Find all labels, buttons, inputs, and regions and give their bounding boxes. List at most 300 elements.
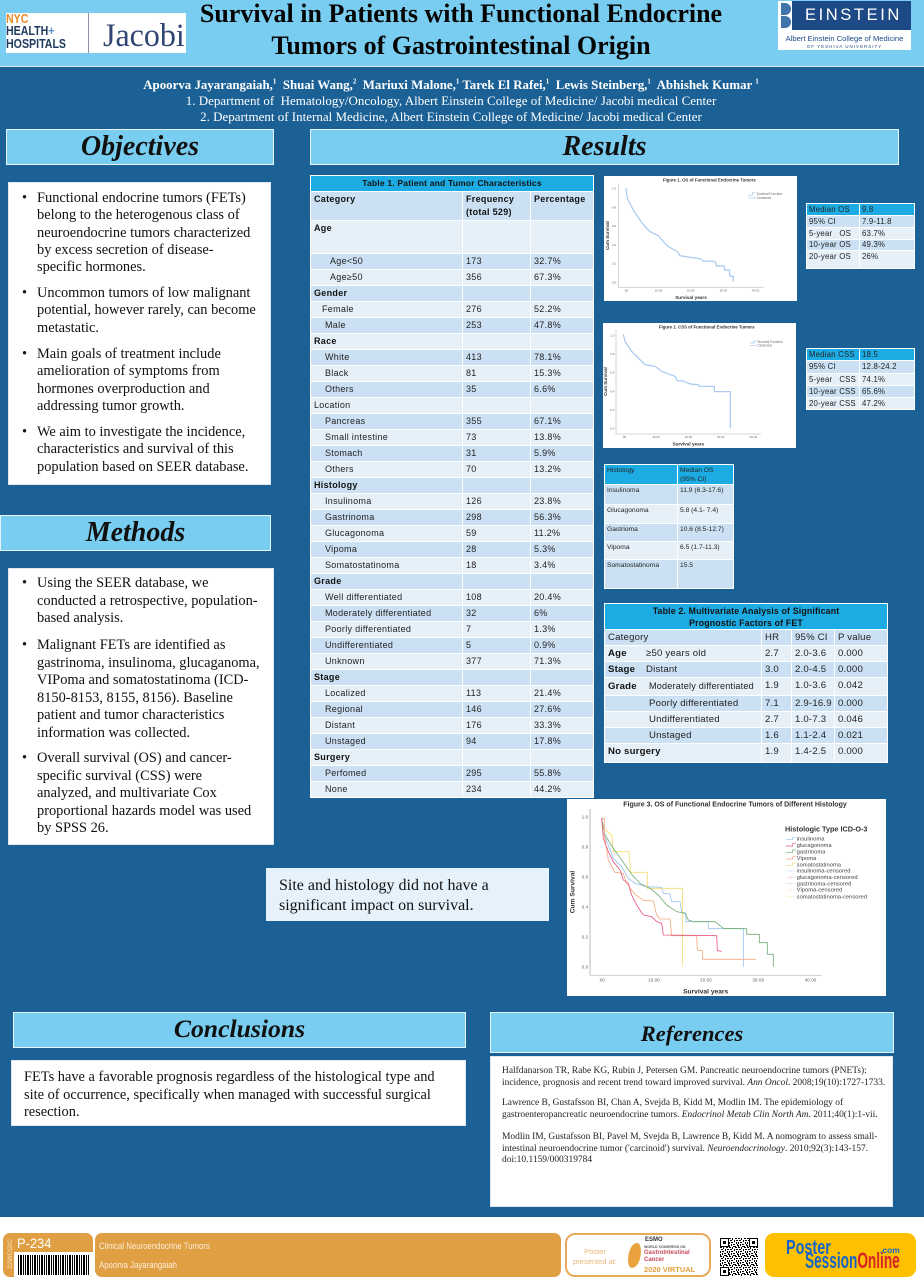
table 1: patient and tumor characteristics: 32.7% (534, 256, 561, 266)
table 1: patient and tumor characteristics: None (325, 784, 348, 794)
table 1: patient and tumor characteristics: Poorly differentiated (325, 624, 411, 634)
table 1: patient and tumor characteristics: Age<50 (330, 256, 363, 266)
figure 3: OS by histology Kaplan-Meier chart: 0.8 (582, 845, 589, 850)
figure 1: OS Kaplan-Meier curve: 0.2 (612, 262, 616, 266)
table 2: multivariate analysis: 0.000 (838, 664, 863, 675)
authors and affiliations: 1. Department of Hematology/Oncology, Albert Einstein College of Medicine/ Jacobi medical Center (186, 93, 716, 108)
table 1: patient and tumor characteristics: Well differentiated (325, 592, 402, 602)
table 1: patient and tumor characteristics: 11.2% (534, 528, 560, 538)
table: median OS by histology: Glucagonoma (607, 507, 649, 514)
curve: somatostatinoma (602, 818, 682, 967)
figure 2: CSS Kaplan-Meier curve: 1.0 (610, 333, 615, 337)
table: OS summary: 9.8 (862, 205, 873, 214)
table: median OS by histology: Somatostatinoma (607, 562, 659, 569)
authors and affiliations (143, 78, 759, 124)
legend: insulinoma-censored (797, 869, 850, 875)
table 1: patient and tumor characteristics: 146 (466, 704, 482, 714)
bullet: study aim (9, 424, 270, 476)
figure 3: OS by histology Kaplan-Meier chart: 40.00 (805, 978, 817, 983)
table 2: multivariate analysis: Moderately differentiated (649, 681, 754, 691)
figure 1: OS Kaplan-Meier curve: 1.0 (612, 186, 616, 190)
heading: Results: Results (562, 131, 647, 162)
reference 3: intestinal neuroendocrine tumor ('carcinoid') survival. Neuroendocrinology. 2010;92(3):143-157. (502, 1144, 868, 1154)
table 1: patient and tumor characteristics: 20.4% (534, 592, 561, 602)
table 1: patient and tumor characteristics: Pancreas (325, 416, 365, 426)
heading: Objectives: Objectives (81, 131, 199, 162)
table 2: multivariate analysis: 0.000 (838, 746, 863, 757)
table 1: patient and tumor characteristics: 32 (466, 608, 477, 618)
table: OS summary: Median OS (809, 205, 850, 214)
table 2: multivariate analysis: Distant (646, 664, 677, 675)
figure 3: OS by histology Kaplan-Meier chart: .00 (598, 978, 605, 983)
table 2: multivariate analysis: 0.042 (838, 680, 863, 691)
table 1: patient and tumor characteristics: 94 (466, 736, 477, 746)
figure 1: OS Kaplan-Meier curve: 0.0 (612, 280, 616, 284)
panel: conclusions text: resection. (24, 1104, 80, 1120)
table: median OS by histology: 15.5 (680, 562, 693, 569)
bullet: what FETs are: by excess secretion of disease- (37, 242, 214, 258)
logo: Albert Einstein College of Medicine: OF YESHIVA UNIVERSITY (807, 44, 882, 49)
table 1: patient and tumor characteristics: 18 (466, 560, 477, 570)
table 1: patient and tumor characteristics: 298 (466, 512, 482, 522)
table 1: patient and tumor characteristics: Somatostatinoma (325, 560, 400, 570)
table 1: patient and tumor characteristics: 13.8% (534, 432, 561, 442)
table 1: patient and tumor characteristics: 413 (466, 352, 482, 362)
table 2: multivariate analysis: 2.7 (765, 648, 779, 659)
figure 1: OS Kaplan-Meier curve: 0.8 (612, 205, 616, 209)
figure 2: CSS Kaplan-Meier curve (603, 323, 796, 448)
bullet: goals of treatment (9, 346, 270, 415)
figure 2: CSS Kaplan-Meier curve: 10.00 (652, 435, 660, 439)
figure 1: OS Kaplan-Meier curve: 0.4 (612, 243, 616, 247)
table 2: multivariate analysis: Prognostic Factors of FET (689, 618, 803, 628)
bullet: survival analysis: analyzed, and multivariate Cox (37, 785, 217, 801)
figure 2: CSS Kaplan-Meier curve: .00 (622, 435, 626, 439)
footer: QR code (720, 1238, 758, 1276)
table 2: multivariate analysis: Grade (608, 681, 637, 692)
table 1: patient and tumor characteristics: 5.3% (534, 544, 556, 554)
table 1: patient and tumor characteristics: Others (325, 464, 354, 474)
table 2: multivariate analysis: 3.0 (765, 664, 779, 675)
logo: NYC Health + Hospitals and Jacobi: HOSPITALS (6, 37, 66, 51)
table 1: patient and tumor characteristics: 52.2% (534, 304, 561, 314)
table: OS summary (806, 203, 915, 269)
legend: gastrinoma-censored (797, 881, 851, 887)
reference 3: Modlin IM, Gustafsson BI, Pavel M, Svejda B, Lawrence B, Kidd M. A nomogram to assess small- (502, 1132, 877, 1142)
logo: NYC Health + Hospitals and Jacobi (6, 13, 186, 53)
reference 3: doi:10.1159/000319784 (502, 1155, 592, 1165)
table 1: patient and tumor characteristics: 3.4% (534, 560, 556, 570)
footer: PosterSessionOnline logo: SessionOnline (805, 1248, 900, 1273)
authors and affiliations: Apoorva Jayarangaiah,1 Shuai Wang,2 Mariuxi Malone,1 Tarek El Rafei,1 Lewis Steinberg,1 Abhishek Kumar 1 (143, 78, 759, 92)
table 2: multivariate analysis: 0.000 (838, 648, 863, 659)
figure 3: OS by histology Kaplan-Meier chart: Cum Survival (570, 871, 577, 913)
bullet: tumor identification: information was collected. (37, 725, 190, 741)
footer: presented at badge: Poster (584, 1247, 606, 1256)
bullet: goals of treatment: amelioration of symptoms from (37, 363, 220, 379)
table 1: patient and tumor characteristics: Female (322, 304, 354, 314)
table 1: patient and tumor characteristics: 6% (534, 608, 548, 618)
table 1: patient and tumor characteristics: 276 (466, 304, 482, 314)
bullet: goals of treatment: hormones overproduction and (37, 381, 210, 397)
legend: glucagonoma-censored (797, 875, 858, 881)
legend: glucagonoma (797, 843, 832, 849)
table 1: patient and tumor characteristics: Histology (314, 480, 358, 490)
logo: Albert Einstein College of Medicine: Albert Einstein College of Medicine (786, 34, 903, 43)
figure 2: CSS Kaplan-Meier curve: 0.2 (610, 408, 615, 412)
table 2: multivariate analysis: 2.0-3.6 (795, 648, 826, 659)
figure 3: OS by histology Kaplan-Meier chart (567, 799, 886, 996)
authors and affiliations: 2. Department of Internal Medicine, Albert Einstein College of Medicine/ Jacobi medical Center (200, 109, 702, 124)
figure 1: OS Kaplan-Meier curve: Survival Function (757, 192, 782, 196)
table: OS summary: 7.9-11.8 (862, 217, 892, 226)
table 1: patient and tumor characteristics: 113 (466, 688, 481, 698)
heading: Conclusions (13, 1012, 466, 1048)
reference 2: gastroenteropancreatic neuroendocrine tumors. Endocrinol Metab Clin North Am. 2011;40(1):1-vii. (502, 1110, 878, 1120)
logo: NYC Health + Hospitals and Jacobi: HEALTH+ (6, 24, 55, 38)
reference 1 (502, 1066, 885, 1088)
bullet: malignant potential: metastatic. (37, 320, 99, 336)
conference code: 22WCGIC (7, 1239, 14, 1269)
table 2: multivariate analysis: 0.046 (838, 714, 863, 725)
table 1: patient and tumor characteristics: 355 (466, 416, 482, 426)
table 2: multivariate analysis: Age (608, 648, 627, 659)
table 1: patient and tumor characteristics: 5 (466, 640, 471, 650)
table 2: multivariate analysis: 1.1-2.4 (795, 730, 826, 741)
reference 2 (502, 1098, 878, 1120)
table 2: multivariate analysis: 7.1 (765, 698, 779, 709)
table 1: patient and tumor characteristics: Surgery (314, 752, 350, 762)
bullet: survival analysis: Overall survival (OS) and cancer- (37, 750, 232, 766)
table 2: multivariate analysis: Category (608, 632, 649, 643)
legend: Vipoma-censored (797, 888, 842, 894)
table: OS summary: 63.7% (862, 229, 885, 238)
figure 1: OS Kaplan-Meier curve (604, 176, 797, 301)
table 1: patient and tumor characteristics: 28 (466, 544, 477, 554)
footer: poster ID tab (3, 1233, 93, 1277)
table 1: patient and tumor characteristics: 1.3% (534, 624, 556, 634)
table 2: multivariate analysis: 0.021 (838, 730, 863, 741)
heading: Methods (0, 515, 271, 551)
table 1: patient and tumor characteristics: Distant (325, 720, 355, 730)
footer: topic and author bar (95, 1233, 561, 1277)
heading: Results (310, 129, 899, 165)
panel: conclusions text (11, 1060, 466, 1126)
bullet: what FETs are: specific hormones. (37, 259, 146, 275)
table 1: patient and tumor characteristics: 17.8% (534, 736, 561, 746)
table 1: patient and tumor characteristics: Category (314, 194, 355, 204)
figure 3: OS by histology Kaplan-Meier chart: 0.0 (582, 964, 589, 969)
table: OS summary: 20-year OS (809, 252, 851, 261)
bullet: tumor identification: Malignant FETs are identified as (37, 637, 225, 653)
bullet: tumor identification: patient and tumor characteristics (37, 707, 224, 723)
table 1: patient and tumor characteristics: Vipoma (325, 544, 357, 554)
table 2: multivariate analysis: ≥50 years old (646, 648, 706, 659)
table: CSS summary: Median CSS (809, 350, 855, 359)
figure 3: OS by histology Kaplan-Meier chart: Figure 3. OS of Functional Endocrine Tumors of Different Histology (623, 801, 847, 808)
footer: presented at badge: ESMO (645, 1237, 663, 1243)
table 1: patient and tumor characteristics: (total 529) (466, 206, 512, 216)
table 1: patient and tumor characteristics: Undifferentiated (325, 640, 393, 650)
table 1: patient and tumor characteristics: Gender (314, 288, 347, 298)
table 1: patient and tumor characteristics: 173 (466, 256, 482, 266)
bullet: what FETs are (9, 190, 270, 276)
footer: presented at badge (565, 1233, 711, 1277)
table 2: multivariate analysis: Stage (608, 664, 635, 675)
legend: somatostatinoma (797, 862, 842, 868)
table 2: multivariate analysis: 1.9 (765, 746, 779, 757)
footer: presented at badge: Cancer (644, 1257, 664, 1263)
table 1: patient and tumor characteristics: Small intestine (325, 432, 388, 442)
panel: conclusions text: FETs have a favorable prognosis regardless of the histological type and (24, 1069, 435, 1085)
figure 2: CSS Kaplan-Meier curve: 20.00 (685, 435, 692, 439)
table 2: multivariate analysis: 95% CI (795, 632, 828, 643)
table 1: patient and tumor characteristics: Others (325, 384, 354, 394)
figure 1: OS Kaplan-Meier curve: .00 (624, 288, 628, 292)
table 2: multivariate analysis: 2.9-16.9 (795, 698, 832, 709)
figure 3: OS by histology Kaplan-Meier chart: 1.0 (582, 815, 589, 820)
legend: insulinoma (797, 837, 825, 843)
bullet: tumor identification: VIPoma and somatostatinoma (ICD- (37, 672, 248, 688)
table 1: patient and tumor characteristics: Regional (325, 704, 363, 714)
panel: conclusions text: site of occurrence, specifically when managed with successful surgical (24, 1086, 431, 1102)
table 1: patient and tumor characteristics: 5.9% (534, 448, 556, 458)
table: CSS summary (806, 348, 915, 410)
table 1: patient and tumor characteristics: 71.3% (534, 656, 561, 666)
table 1: patient and tumor characteristics: Unstaged (325, 736, 366, 746)
bullet: study design (9, 575, 273, 628)
reference 1: Halfdanarson TR, Rabe KG, Rubin J, Petersen GM. Pancreatic neuroendocrine tumors (PNETs): (502, 1066, 867, 1076)
heading: Methods: Methods (86, 517, 185, 548)
table 1: patient and tumor characteristics: Unknown (325, 656, 365, 666)
legend (785, 824, 867, 900)
panel: methods text (8, 568, 274, 845)
table 2: multivariate analysis: 0.000 (838, 698, 863, 709)
table: median OS by histology (604, 464, 734, 589)
table 1: patient and tumor characteristics: 70 (466, 464, 477, 474)
heading: References (490, 1012, 894, 1053)
table 2: multivariate analysis: 1.0-3.6 (795, 680, 826, 691)
table 1: patient and tumor characteristics: 56.3% (534, 512, 561, 522)
bullet: malignant potential: potential, however rarely, can become (37, 302, 256, 318)
bullet: malignant potential (9, 285, 270, 337)
figure 2: CSS Kaplan-Meier curve: Survival years (673, 441, 705, 446)
legend: gastrinoma (797, 850, 826, 856)
figure 1: OS Kaplan-Meier curve: 0.6 (612, 224, 616, 228)
table 1: patient and tumor characteristics: Male (325, 320, 346, 330)
icon: wheat (628, 1243, 641, 1268)
table 1: patient and tumor characteristics: 33.3% (534, 720, 561, 730)
figure 2: CSS Kaplan-Meier curve: 0.0 (610, 427, 615, 431)
reference 2: Lawrence B, Gustafsson BI, Chan A, Svejda B, Kidd M, Modlin IM. The epidemiology of (502, 1098, 843, 1108)
table 1: patient and tumor characteristics: Perfomed (325, 768, 366, 778)
bullet: study aim: We aim to investigate the incidence, (37, 424, 245, 440)
table 1: patient and tumor characteristics: 15.3% (534, 368, 561, 378)
figure 2: CSS Kaplan-Meier curve: 0.6 (610, 371, 615, 375)
figure 3: OS by histology Kaplan-Meier chart: Survival years (683, 989, 729, 996)
table: median OS by histology: (95% CI) (680, 476, 706, 483)
table 1: patient and tumor characteristics: Frequency (466, 194, 514, 204)
logo: NYC Health + Hospitals and Jacobi: Jacobi (103, 18, 185, 53)
footer: presented at badge: WORLD CONGRESS ON (644, 1245, 686, 1249)
table 1: patient and tumor characteristics: 44.2% (534, 784, 561, 794)
table 1: patient and tumor characteristics: Glucagonoma (325, 528, 384, 538)
table 1: patient and tumor characteristics: 6.6% (534, 384, 556, 394)
reference 1: incidence, prognosis and recent trend toward improved survival. Ann Oncol. 2008;19(10):1727-1733. (502, 1078, 885, 1088)
figure 2: CSS Kaplan-Meier curve: Censored (757, 344, 772, 348)
table 1: patient and tumor characteristics: 356 (466, 272, 482, 282)
heading: Conclusions: Conclusions (174, 1014, 305, 1043)
table: CSS summary: 10-year CSS (809, 387, 856, 396)
table 1: patient and tumor characteristics: 59 (466, 528, 477, 538)
table 1: patient and tumor characteristics: White (325, 352, 350, 362)
figure 2: CSS Kaplan-Meier curve: Survival Function (757, 340, 783, 344)
footer: presented at badge: presented at: (573, 1257, 617, 1266)
heading: References: References (641, 1021, 743, 1046)
table 1: patient and tumor characteristics: Age≥50 (330, 272, 363, 282)
bullet: survival analysis: specific survival (CSS) were (37, 768, 202, 784)
table: median OS by histology: Vipoma (607, 544, 630, 551)
figure 3: OS by histology Kaplan-Meier chart: 30.00 (752, 978, 765, 983)
figure 1: OS Kaplan-Meier curve: 30.00 (720, 288, 727, 292)
table: median OS by histology: 6.5 (1.7-11.3) (680, 544, 720, 551)
curve: gastrinoma (602, 818, 773, 967)
table: OS summary: 49.3% (862, 240, 885, 249)
bullet: study design: conducted a retrospective, population- (37, 593, 258, 609)
table 2: multivariate analysis: 2.7 (765, 714, 779, 725)
table 1: patient and tumor characteristics: 126 (466, 496, 482, 506)
figure 3: OS by histology Kaplan-Meier chart: 0.6 (582, 875, 589, 880)
table 1: patient and tumor characteristics: Percentage (534, 194, 586, 204)
table 2: multivariate analysis: P value (838, 632, 871, 643)
heading: Objectives (6, 129, 274, 165)
table: OS summary: 5-year OS (809, 229, 851, 238)
figure 3: OS by histology Kaplan-Meier chart: 0.2 (582, 935, 589, 940)
table: OS summary: 95% CI (809, 217, 836, 226)
table: OS summary: 10-year OS (809, 240, 851, 249)
table 2: multivariate analysis: No surgery (608, 746, 661, 757)
table 1: patient and tumor characteristics: 253 (466, 320, 482, 330)
figure 2: CSS Kaplan-Meier curve: 30.00 (717, 435, 725, 439)
figure 2: CSS Kaplan-Meier curve: Figure 2. CSS of Functional Endocrine Tumors (659, 324, 755, 329)
table 1: patient and tumor characteristics: 73 (466, 432, 477, 442)
table 1: patient and tumor characteristics: 67.3% (534, 272, 561, 282)
bullet: survival analysis (9, 750, 273, 838)
table 1: patient and tumor characteristics: 27.6% (534, 704, 561, 714)
table 1: patient and tumor characteristics: 81 (466, 368, 477, 378)
bullet: tumor identification: 8150-8153, 8155, 8156). Baseline (37, 690, 233, 706)
figure 2: CSS Kaplan-Meier curve: 0.8 (610, 352, 615, 356)
table: CSS summary: 20-year CSS (809, 399, 856, 408)
table 2: multivariate analysis (604, 603, 888, 763)
footer: presented at badge: GastroIntestinal (644, 1250, 690, 1256)
panel: references (490, 1056, 893, 1207)
table: CSS summary: 95% CI (809, 362, 836, 371)
table 1: patient and tumor characteristics: 7 (466, 624, 471, 634)
header banner (0, 0, 924, 67)
table 1: patient and tumor characteristics: 234 (466, 784, 482, 794)
figure 1: OS Kaplan-Meier curve: 10.00 (655, 288, 662, 292)
footer: PosterSessionOnline logo (765, 1233, 916, 1277)
curve: glucagonoma (602, 818, 722, 951)
bullet: tumor identification: gastrinoma, insulinoma, glucaganoma, (37, 655, 260, 671)
table 1: patient and tumor characteristics: 0.9% (534, 640, 556, 650)
table 1: patient and tumor characteristics: 108 (466, 592, 482, 602)
title (200, 0, 722, 60)
footer: topic and author bar: Apoorva Jayarangaiah (99, 1260, 177, 1271)
table 1: patient and tumor characteristics: 78.1% (534, 352, 561, 362)
table 1: patient and tumor characteristics (310, 175, 594, 798)
bullet: goals of treatment: Main goals of treatment include (37, 346, 221, 362)
legend: Vipoma (797, 856, 817, 862)
bullet: what FETs are: belong to the heterogenous class of (37, 207, 240, 223)
table 1: patient and tumor characteristics: Localized (325, 688, 366, 698)
bullet: study aim: characteristics and survival of this (37, 441, 234, 457)
table 1: patient and tumor characteristics: Location (314, 400, 350, 410)
table 1: patient and tumor characteristics: Age (314, 222, 332, 232)
logo: Albert Einstein College of Medicine (778, 1, 911, 50)
figure 1: OS Kaplan-Meier curve: Survival years (675, 295, 707, 300)
bullet: what FETs are: neuroendocrine tumors characterized (37, 225, 250, 241)
table 1: patient and tumor characteristics: 176 (466, 720, 482, 730)
legend: somatostatinoma-censored (797, 894, 867, 900)
curve: insulinoma (602, 818, 743, 967)
logo: Albert Einstein College of Medicine: EINSTEIN (805, 6, 902, 24)
callout: site and histology (266, 868, 549, 921)
table 1: patient and tumor characteristics: 47.8% (534, 320, 561, 330)
table: CSS summary: 47.2% (862, 399, 885, 408)
panel: objectives text (8, 182, 271, 485)
figure 1: OS Kaplan-Meier curve: 40.00 (752, 288, 760, 292)
table 1: patient and tumor characteristics: Moderately differentiated (325, 608, 431, 618)
footer: PosterSessionOnline logo: Poster (786, 1237, 831, 1259)
figure 1: OS Kaplan-Meier curve: 20.00 (687, 288, 695, 292)
figure 2: CSS Kaplan-Meier curve: Cum Survival (603, 367, 608, 396)
footer: PosterSessionOnline logo: .com (880, 1245, 900, 1255)
table: median OS by histology: 10.6 (8.5-12.7) (680, 526, 724, 533)
footer: presented at badge: 2020 VIRTUAL (644, 1265, 695, 1274)
table 1: patient and tumor characteristics: 67.1% (534, 416, 561, 426)
figure 1: OS Kaplan-Meier curve: Figure 1. OS of Functional Endocrine Tumors (663, 178, 756, 183)
table 1: patient and tumor characteristics: Stage (314, 672, 340, 682)
figure 2: CSS Kaplan-Meier curve: 0.4 (610, 389, 615, 393)
table 1: patient and tumor characteristics: 55.8% (534, 768, 561, 778)
table: CSS summary: 74.1% (862, 375, 885, 384)
table 1: patient and tumor characteristics: Stomach (325, 448, 363, 458)
table 1: patient and tumor characteristics: 35 (466, 384, 477, 394)
table 1: patient and tumor characteristics: Gastrinoma (325, 512, 375, 522)
table 1: patient and tumor characteristics: Grade (314, 576, 342, 586)
table: CSS summary: 5-year CSS (809, 375, 856, 384)
bullet: study design: based analysis. (37, 610, 123, 626)
barcode (18, 1255, 89, 1275)
table 2: multivariate analysis: 1.9 (765, 680, 779, 691)
table: median OS by histology: Gastrioma (607, 526, 638, 533)
table: median OS by histology: 11.9 (6.3-17.6) (680, 487, 723, 494)
bullet: survival analysis: by SPSS 26. (37, 820, 109, 836)
bullet: study aim: population based on SEER database. (37, 459, 248, 475)
table 2: multivariate analysis: Unstaged (649, 730, 692, 741)
bullet: what FETs are: Functional endocrine tumors (FETs) (37, 190, 246, 206)
table 1: patient and tumor characteristics: 295 (466, 768, 482, 778)
table: CSS summary: 12.8-24.2 (862, 362, 897, 371)
table: median OS by histology: Median OS (680, 467, 713, 474)
figure 1: OS Kaplan-Meier curve: Censored (757, 196, 771, 200)
figure 3: OS by histology Kaplan-Meier chart: 0.4 (582, 905, 589, 910)
bullet: tumor identification (9, 637, 273, 743)
table: CSS summary: 18.5 (862, 350, 878, 359)
table 2: multivariate analysis: Table 2. Multivariate Analysis of Significant (653, 606, 839, 616)
